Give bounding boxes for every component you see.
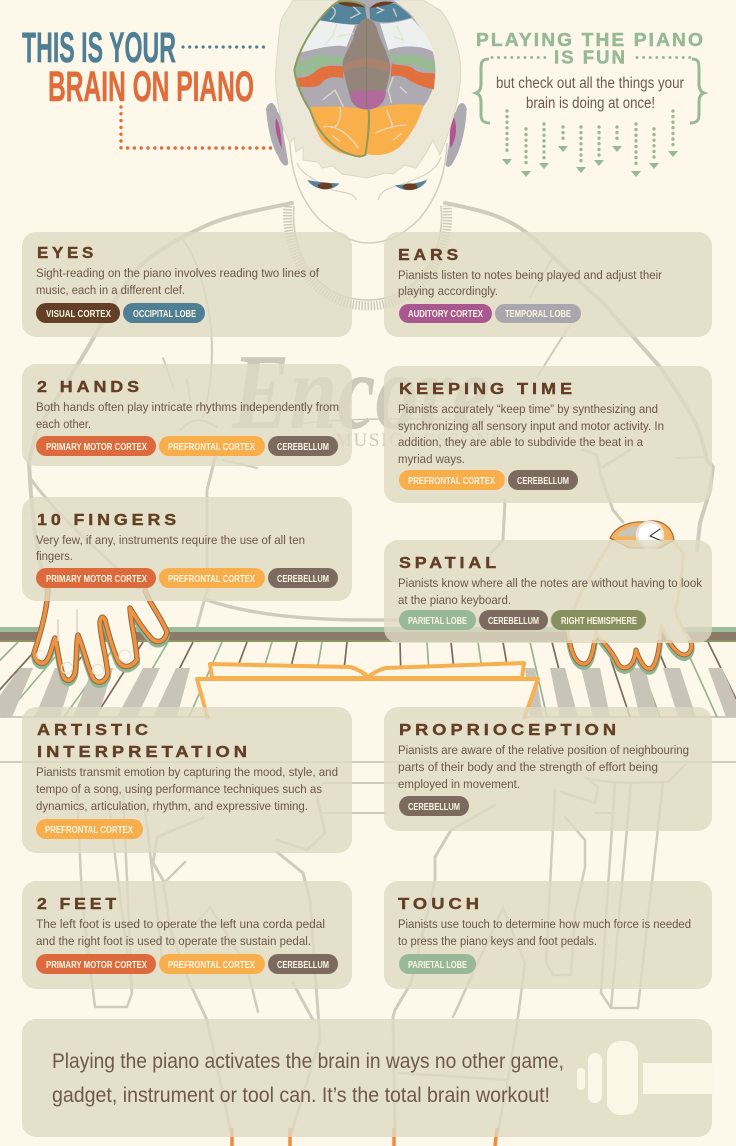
panel: ears: Pianists listen to notes being played and adjust their [398,268,662,282]
panel: artistic interpretation: Pianists transmit emotion by capturing the mood, style, and [36,765,338,779]
panel: 10 fingers: 10 FINGERS [37,512,180,529]
tag: prefrontal cortex: PREFRONTAL CORTEX [408,475,495,487]
panel: touch [384,881,712,989]
subtitle: playing the piano is fun: PLAYING THE PIANO [476,30,705,50]
tag: prefrontal cortex [399,470,505,490]
tag: parietal lobe [399,954,476,974]
panel: keeping time: Pianists accurately “keep time” by synthesizing and [398,402,658,416]
tag: cerebellum: CEREBELLUM [488,615,539,627]
brow lines [297,157,441,200]
panel: 10 fingers [22,497,352,601]
tag: cerebellum: CEREBELLUM [277,959,329,971]
tag: prefrontal cortex [159,568,265,588]
tag: primary motor cortex: PRIMARY MOTOR CORTEX [46,441,147,453]
panel: eyes [22,232,352,337]
tag: right hemisphere: RIGHT HEMISPHERE [561,615,637,627]
tag: prefrontal cortex: PREFRONTAL CORTEX [168,573,255,585]
tag: cerebellum [399,796,469,816]
panel: eyes: EYES [37,245,97,262]
title: THIS IS YOUR [22,24,176,72]
tag: prefrontal cortex [159,954,265,974]
panel: keeping time: KEEPING TIME [399,381,576,398]
panel: keeping time [384,366,712,503]
subtitle: playing the piano is fun: brain is doing at once! [526,95,655,112]
panel: 2 hands: each other. [36,417,91,431]
dotted brace top [492,56,690,59]
panel: artistic interpretation: dynamics, articulation, rhythm, and expressive timing. [36,799,308,813]
region: occipital left [320,4,367,24]
panel: conclusion: Playing the piano activates the brain in ways no other game, [52,1050,564,1073]
veins [323,7,407,148]
icon: plug [577,1041,713,1115]
panel: keeping time: addition, they are able to subdivide the beat in a [398,435,643,449]
panel: eyes: Sight-reading on the piano involves reading two lines of [36,266,320,280]
right brace [690,59,704,123]
panel: 2 feet: and the right foot is used to operate the sustain pedal. [36,934,311,948]
tag: parietal lobe: PARIETAL LOBE [408,615,467,627]
subtitle: playing the piano is fun [476,30,705,123]
panel: spatial [384,540,712,643]
piano key dividers [0,642,736,717]
face outline [290,143,447,243]
tag: primary motor cortex [36,954,156,974]
panel: proprioception: employed in movement. [398,777,520,791]
tag: cerebellum: CEREBELLUM [408,801,460,813]
skull and hair [276,0,461,178]
watermark: encore music: Encore [231,333,490,452]
ear right [446,103,467,167]
region: green right [388,50,435,72]
region: prefrontal white right [380,18,433,52]
dotted connector: title to ear [121,107,274,148]
tag: prefrontal cortex: PREFRONTAL CORTEX [168,959,255,971]
tag: cerebellum [508,470,578,490]
panel: touch: Pianists use touch to determine how much force is needed [398,917,691,931]
panel: ears [384,232,712,337]
region: visual cortex [337,1,394,8]
subtitle: playing the piano is fun: IS FUN [554,48,627,68]
panel: keeping time: myriad ways. [398,452,465,466]
subtitle: playing the piano is fun: but check out all the things your [496,75,684,92]
piano fallboard band [0,627,736,642]
left brace [476,59,490,123]
tag: prefrontal cortex [159,436,265,456]
panel: artistic interpretation [22,707,352,853]
left hand on keys [34,590,167,685]
dotted down arrows [502,111,678,177]
panel: 10 fingers: Very few, if any, instruments require the use of all ten [36,533,305,547]
tag: temporal lobe [495,304,581,323]
tag: cerebellum [268,436,338,456]
panel: spatial: Pianists know where all the notes are without having to look [398,576,703,590]
tag: cerebellum [479,610,548,630]
panel: proprioception [384,707,712,831]
region: yellow left [309,107,368,156]
tag: right hemisphere [551,610,646,630]
panel: 2 feet: The left foot is used to operate the left una corda pedal [36,917,325,931]
tag: primary motor cortex: PRIMARY MOTOR CORTEX [46,573,147,585]
panel: artistic interpretation: INTERPRETATION [37,744,251,761]
panel: touch: to press the piano keys and foot pedals. [398,934,597,948]
wristwatch [610,521,674,548]
panel: ears: EARS [398,247,462,264]
tag: visual cortex [36,303,120,323]
panel: proprioception: PROPRIOCEPTION [399,722,620,739]
region: orange right [391,63,435,89]
panel: conclusion [22,1019,713,1137]
dotted connector: title to brain [183,45,266,49]
tag: parietal lobe [399,610,476,630]
tag: cerebellum [268,954,338,974]
brain regions [294,0,435,157]
tag: occipital lobe [123,303,205,323]
central cortex overlay [343,18,390,109]
panel: 2 hands: Both hands often play intricate rhythms independently from [36,400,339,414]
tag: parietal lobe: PARIETAL LOBE [408,959,467,971]
panel: 2 feet: 2 FEET [37,896,120,913]
panel: 10 fingers: fingers. [36,549,73,563]
eye left [307,180,339,189]
panel: proprioception: parts of their body and the strength of effort being [398,760,658,774]
tag: primary motor cortex [36,436,156,456]
tag: auditory cortex: AUDITORY CORTEX [408,308,483,320]
panel: 2 hands: 2 HANDS [37,379,143,396]
open music book [197,663,538,719]
panel: artistic interpretation: ARTISTIC [37,722,152,739]
tag: prefrontal cortex: PREFRONTAL CORTEX [45,824,133,836]
tag: prefrontal cortex [36,819,143,839]
title [22,24,254,111]
tag: cerebellum [268,568,338,588]
title: BRAIN ON PIANO [48,63,254,111]
panel: proprioception: Pianists are aware of the relative position of neighbouring [398,743,689,757]
right leg [393,805,495,1137]
right hand with wristwatch [568,521,692,672]
region: prefrontal white left [299,21,355,53]
head and brain [266,0,467,306]
region: orange left [296,66,343,87]
tag: auditory cortex [399,304,492,323]
tag: cerebellum: CEREBELLUM [517,475,569,487]
panel: touch: TOUCH [398,896,483,913]
tag: cerebellum: CEREBELLUM [277,573,329,585]
ear left [266,103,288,166]
panel: artistic interpretation: tempo of a song, using performance techniques such as [36,782,322,796]
tag: cerebellum: CEREBELLUM [277,441,329,453]
panel: 2 feet [22,881,352,989]
brain base and outline [294,0,435,157]
panel: spatial: at the piano keyboard. [398,593,511,607]
left leg [77,790,132,1007]
region: green left [295,55,343,76]
tag: primary motor cortex: PRIMARY MOTOR CORTEX [46,959,147,971]
eye right [395,179,427,190]
tag: prefrontal cortex: PREFRONTAL CORTEX [168,441,255,453]
panel: keeping time: synchronizing all sensory input and motor activity. In [398,419,664,433]
region: occipital right [369,3,412,22]
panel: conclusion: gadget, instrument or tool can. It’s the total brain workout! [52,1084,550,1107]
collar [288,206,448,306]
tag: primary motor cortex [36,568,156,588]
brain outline [294,1,369,157]
region: auditory cortex [350,90,386,109]
tag: occipital lobe: OCCIPITAL LOBE [133,308,196,320]
panel: eyes: music, each in a different clef. [36,283,185,297]
tag: temporal lobe: TEMPORAL LOBE [505,308,571,320]
central orange band [343,59,390,73]
feet orange edges [232,1128,497,1146]
piano [0,627,736,719]
panel: spatial: SPATIAL [399,555,500,572]
piano black keys [0,668,736,717]
panel: 2 hands [22,364,352,466]
region: yellow right [367,104,423,155]
watermark: encore music: MUSIC LESSONS [335,430,505,451]
panel: ears: playing accordingly. [398,284,498,298]
tag: visual cortex: VISUAL CORTEX [46,308,111,320]
